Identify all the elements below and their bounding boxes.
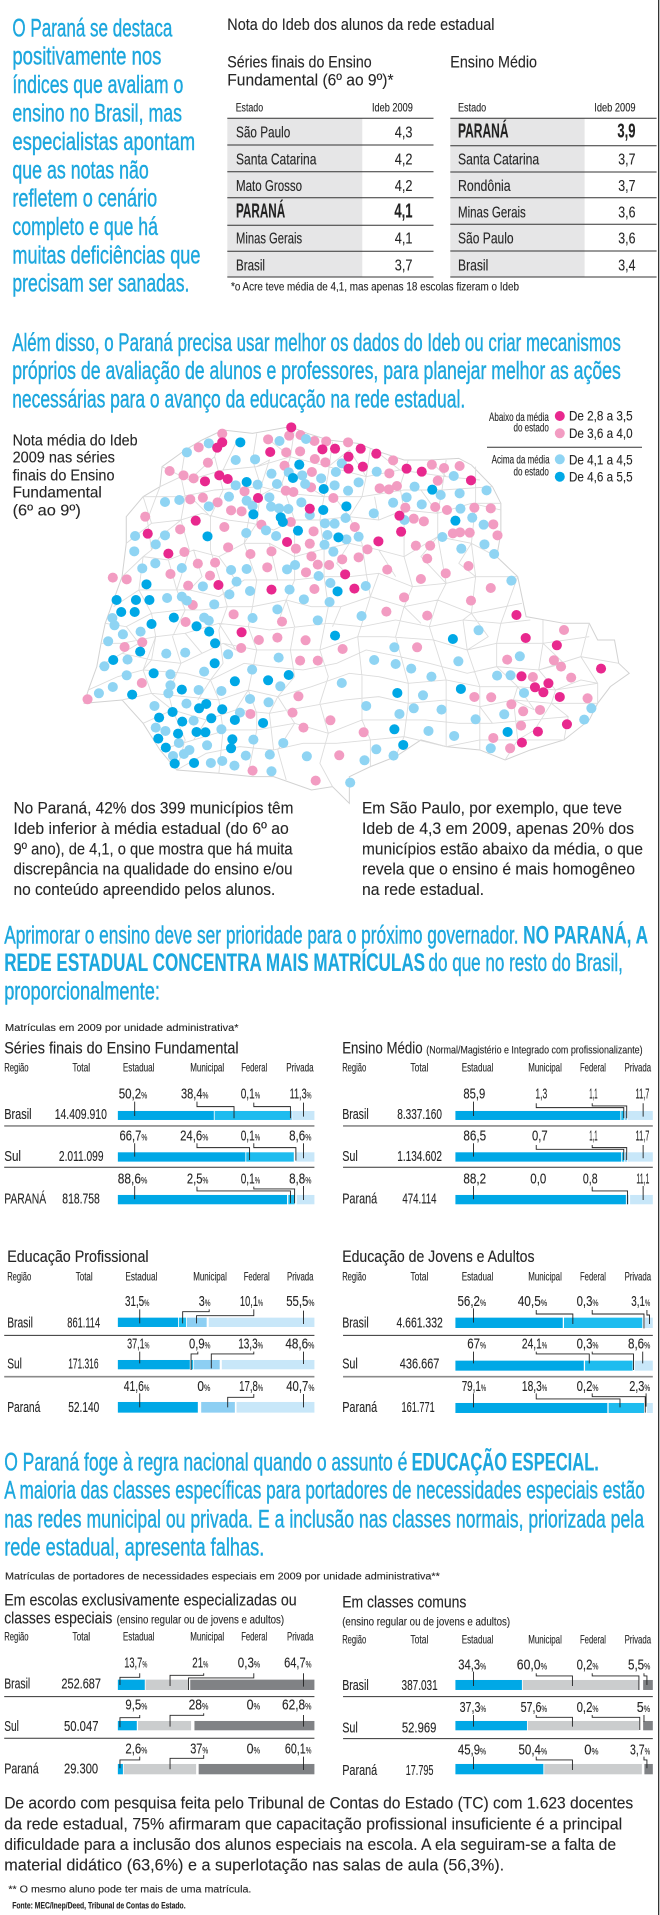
table: Ensino Médio: PARANÁ — [458, 120, 508, 143]
table: Séries finais: 4,3 — [395, 125, 413, 142]
row: Paraná: Paraná — [342, 1762, 378, 1779]
chart: classes comuns — [342, 1594, 653, 1779]
table: Séries finais: Santa Catarina — [236, 151, 316, 168]
row: Paraná — [342, 1170, 653, 1208]
column headers: Federal — [580, 1269, 606, 1283]
map: municípios do Paraná — [82, 422, 629, 803]
chart title — [342, 1039, 643, 1057]
table: Séries finais: PARANÁ — [236, 200, 285, 223]
row: Brasil — [342, 1293, 653, 1335]
map caption: (6º ao 9º) — [13, 502, 81, 519]
row: Brasil — [342, 1656, 653, 1697]
column headers: Privada — [287, 1630, 314, 1644]
row: Brasil: 64,7% — [284, 1655, 312, 1672]
row: Brasil: 0,3% — [238, 1655, 260, 1672]
column headers: Privada — [286, 1061, 314, 1075]
map caption — [13, 432, 138, 519]
row: Brasil: 3% — [199, 1293, 210, 1310]
column headers: Total — [72, 1061, 90, 1075]
row: Sul: 24,1% — [522, 1336, 547, 1353]
row: Sul: 436.667 — [400, 1356, 439, 1373]
column headers: Estadual — [125, 1269, 157, 1283]
column headers — [4, 1061, 314, 1075]
chart title: Ensino Médio — [342, 1039, 423, 1057]
table title: Ensino Médio — [450, 54, 537, 72]
row: Brasil: Brasil — [4, 1106, 32, 1123]
table: Séries finais: Estado — [236, 101, 263, 115]
column headers — [4, 1630, 314, 1644]
row: Brasil: 85,9 — [463, 1085, 485, 1102]
row: Brasil: Brasil — [4, 1675, 30, 1692]
row: Brasil: Brasil — [342, 1106, 369, 1123]
row: Sul: 0,2% — [577, 1699, 598, 1716]
intro headline: que as notas não — [12, 156, 149, 184]
chart title: Séries finais do Ensino Fundamental — [4, 1039, 239, 1057]
map caption: 2009 nas séries — [13, 450, 115, 467]
row: Brasil: 40,5% — [518, 1293, 547, 1310]
chart caption: Matrículas em 2009 por unidade administrativa* — [5, 1023, 239, 1034]
row: Sul: 62,8% — [282, 1697, 312, 1714]
row: Brasil: 56,2% — [458, 1293, 486, 1310]
row: Paraná — [4, 1740, 314, 1777]
text block: Paraná — [14, 798, 293, 899]
row: Paraná: 50,4% — [518, 1741, 547, 1758]
row: Sul — [342, 1336, 653, 1377]
chart: escolas especializadas — [4, 1592, 314, 1777]
intro headline: ensino no Brasil, mas — [12, 100, 182, 128]
row: Sul: 50.047 — [64, 1718, 98, 1735]
row: Sul: Sul — [342, 1148, 358, 1165]
section headline: educação especial: rede estadual, apresenta falhas. — [4, 1533, 264, 1561]
column headers — [7, 1269, 314, 1283]
intro headline: O Paraná se destaca — [12, 14, 172, 42]
row: Brasil: 10,1% — [240, 1293, 263, 1310]
row: Sul — [4, 1336, 314, 1377]
intro headline: positivamente nos — [12, 43, 161, 71]
row: Brasil: 21% — [192, 1655, 208, 1672]
row: Paraná: 18,3% — [522, 1378, 547, 1395]
row: Paraná — [342, 1741, 653, 1779]
chart: Séries finais do Ensino Fundamental — [4, 1039, 314, 1208]
row: Sul: Sul — [7, 1356, 22, 1373]
table title — [227, 54, 394, 89]
map legend: De 3,6 a 4,0 — [569, 425, 633, 441]
column headers: Região — [342, 1632, 366, 1646]
text block: pesquisa TC — [4, 1794, 633, 1875]
chart title: Em escolas exclusivamente especializadas ou — [4, 1592, 297, 1610]
footnote: ** O mesmo aluno pode ter mais de uma matrícula. — [8, 1884, 251, 1895]
chart title: Educação de Jovens e Adultos — [342, 1248, 534, 1266]
text block: São Paulo: Ideb de 4,3 em 2009, apenas 20% dos — [362, 819, 634, 838]
row: Paraná: 41,6% — [124, 1378, 149, 1395]
text block: pesquisa TC: dificuldade para a inclusão dos alunos especiais na escola. A ela seguiram-se a falta de — [4, 1835, 616, 1854]
row: Sul: 67% — [467, 1336, 486, 1353]
table: Ensino Médio: 3,4 — [618, 257, 636, 274]
table: Ensino Médio: 3,9 — [617, 121, 636, 143]
text block: Paraná: No Paraná, 42% dos 399 municípios têm — [14, 798, 293, 817]
column headers — [342, 1269, 651, 1283]
row: Brasil: Brasil — [342, 1677, 369, 1694]
table: Ensino Médio: Estado — [458, 101, 486, 115]
text block: Paraná: Ideb inferior à média estadual (do 6º ao — [14, 819, 289, 838]
row: Brasil: 5,5% — [628, 1656, 650, 1673]
text block: Paraná: discrepância na qualidade do ensino e/ou — [14, 860, 292, 879]
table: Séries finais: 3,7 — [395, 257, 413, 274]
row: Sul — [342, 1699, 653, 1739]
intro headline: precisam ser sanadas. — [12, 270, 189, 298]
row: Sul: 0,7 — [532, 1128, 548, 1145]
row: Brasil: 0,3% — [577, 1293, 598, 1310]
row: Brasil — [4, 1293, 314, 1335]
row: Brasil: 50,2% — [119, 1085, 147, 1102]
intro headline: índices que avaliam o — [12, 71, 183, 99]
row: Sul: Sul — [342, 1356, 358, 1373]
map legend: De 2,8 a 3,5 — [569, 408, 633, 424]
column headers: Região — [4, 1630, 29, 1644]
table: Ensino Médio: Santa Catarina — [458, 151, 539, 168]
text block: Paraná: 9º ano), de 4,1, o que mostra que há muita — [14, 839, 293, 858]
text block: São Paulo: Em São Paulo, por exemplo, que teve — [362, 798, 622, 817]
row: Sul — [4, 1697, 314, 1738]
chart: Educação de Jovens e Adultos — [342, 1248, 653, 1416]
row: Brasil: 60,0% — [517, 1656, 547, 1673]
column headers: Federal — [580, 1632, 606, 1646]
row: Paraná: 40,7% — [286, 1378, 314, 1395]
row: Paraná: 2,5% — [187, 1170, 208, 1187]
row: Paraná: 17.795 — [406, 1762, 434, 1779]
table: Ensino Médio: 3,6 — [618, 205, 636, 222]
row: Sul: 0,9% — [189, 1336, 210, 1353]
section headline: educação especial: O Paraná foge à regra nacional quando o assunto é — [4, 1449, 407, 1477]
row: Paraná: Paraná — [7, 1399, 41, 1416]
column headers: Privada — [287, 1269, 314, 1283]
row: Sul: 2.011.099 — [59, 1148, 104, 1165]
table: Ensino Médio: Minas Gerais — [458, 205, 526, 222]
row: Paraná: 29.300 — [64, 1760, 98, 1777]
column headers: Estadual — [462, 1061, 493, 1075]
row: Sul: 1.134.602 — [397, 1148, 442, 1165]
column headers — [342, 1061, 651, 1075]
row: Brasil — [4, 1085, 314, 1126]
row: Sul: 8,6% — [628, 1336, 650, 1353]
row: Paraná: 79,1% — [462, 1378, 486, 1395]
column headers: Municipal — [528, 1061, 562, 1075]
row: Brasil: 3,1% — [631, 1293, 650, 1310]
row: Paraná: 0% — [197, 1378, 210, 1395]
row: Sul: 57,6% — [521, 1699, 547, 1716]
row: Brasil: 38,4% — [181, 1085, 208, 1102]
row: Brasil: 1,1 — [589, 1085, 598, 1102]
column headers: Federal — [241, 1630, 267, 1644]
text block: São Paulo: revela que o ensino é mais homogêneo — [362, 860, 635, 879]
row: Sul: 37,1% — [127, 1336, 149, 1353]
row: Brasil: 31,5% — [125, 1293, 149, 1310]
table: Ensino Médio: Rondônia — [458, 178, 511, 195]
row: Sul: 0,3% — [577, 1336, 598, 1353]
row: Paraná: 17,8% — [239, 1378, 263, 1395]
column headers: Total — [410, 1269, 428, 1283]
row: Paraná — [7, 1378, 314, 1416]
text block: São Paulo — [362, 798, 643, 899]
column headers: Total — [410, 1061, 428, 1075]
column headers: Federal — [580, 1061, 606, 1075]
column headers: Região — [7, 1269, 31, 1283]
row: Sul — [342, 1128, 653, 1167]
row: Paraná: 818.758 — [62, 1191, 100, 1208]
row: Paraná: Paraná — [342, 1191, 378, 1208]
row: Sul: 13,3% — [238, 1336, 263, 1353]
row: Brasil: 252.687 — [61, 1675, 101, 1692]
table: Séries finais — [227, 54, 434, 277]
table: Séries finais: 4,1 — [395, 231, 413, 248]
table footnote: *o Acre teve média de 4,1, mas apenas 18 escolas fizeram o Ideb — [231, 280, 519, 294]
chart title: classes especiais — [4, 1609, 112, 1627]
source: Fonte: MEC/Inep/Deed, Tribunal de Contas do Estado. — [12, 1900, 186, 1910]
column headers — [342, 1632, 651, 1646]
section headline: matrículas: proporcionalmente: — [4, 977, 160, 1005]
row: Brasil: 0,1% — [241, 1085, 260, 1102]
row: Sul: 24,6% — [180, 1128, 208, 1145]
chart title: (ensino regular ou de jovens e adultos) — [342, 1614, 510, 1628]
column headers: Federal — [241, 1061, 267, 1075]
column headers: Total — [72, 1630, 90, 1644]
row: Paraná: 3,7% — [630, 1741, 650, 1758]
text block: pesquisa TC: material didático (63,6%) e a superlotação nas salas de aula (56,3%). — [4, 1856, 504, 1875]
row: Paraná: PARANÁ — [4, 1191, 46, 1208]
row: Paraná: 52.140 — [68, 1399, 99, 1416]
row: Paraná: 37% — [190, 1740, 208, 1757]
chart title: (ensino regular ou de jovens e adultos) — [117, 1612, 284, 1626]
row: Paraná: 45,9% — [458, 1741, 486, 1758]
text block: pesquisa TC: da rede estadual, 75% afirmaram que capacitação profissional insuficiente é a principal — [4, 1814, 622, 1833]
row: Paraná: 0% — [584, 1741, 598, 1758]
row: Brasil: 861.114 — [67, 1314, 100, 1331]
map legend — [487, 408, 642, 485]
table: Séries finais: Minas Gerais — [236, 231, 302, 248]
row: Brasil — [4, 1655, 314, 1697]
map legend: De 4,6 a 5,5 — [569, 469, 633, 485]
column headers: Estadual — [462, 1269, 493, 1283]
row: Paraná: 0,1% — [241, 1170, 260, 1187]
row: Paraná: 88,6% — [118, 1170, 147, 1187]
column headers: Municipal — [190, 1061, 224, 1075]
row: Brasil — [342, 1085, 653, 1126]
column headers: Estadual — [123, 1630, 154, 1644]
text block: São Paulo: na rede estadual. — [362, 880, 484, 899]
table: Séries finais: 4,2 — [395, 178, 413, 195]
section headline: matrículas: REDE ESTADUAL CONCENTRA MAIS MATRÍCULAS — [4, 948, 425, 977]
chart title: Educação Profissional — [7, 1248, 149, 1266]
column headers: Total — [410, 1632, 428, 1646]
map caption: Nota média do Ideb — [13, 432, 138, 449]
row: Paraná: 8,8% — [289, 1170, 311, 1187]
panel: Ideb tables — [227, 16, 657, 294]
row: Sul: 48,6% — [285, 1336, 314, 1353]
table title: Fundamental (6º ao 9º)* — [227, 71, 394, 89]
intro headline: muitas deficiências que — [12, 241, 200, 269]
row: Sul: Sul — [4, 1718, 19, 1735]
row: Sul: 0% — [247, 1697, 260, 1714]
row: Sul — [4, 1128, 314, 1167]
chart title: Em classes comuns — [342, 1594, 466, 1612]
row: Brasil: Brasil — [7, 1314, 33, 1331]
intro headline — [12, 14, 200, 298]
table: Ensino Médio — [450, 54, 657, 277]
section headline: educação especial — [4, 1447, 645, 1561]
row: Paraná: 2,3% — [629, 1378, 650, 1395]
text block: Paraná: no conteúdo apreendido pelos alunos. — [14, 880, 275, 899]
row: Paraná: 0,2% — [577, 1378, 598, 1395]
row: Brasil: 14.409.910 — [55, 1106, 107, 1123]
intro headline: completo e que há — [12, 213, 158, 241]
table: Ensino Médio: Brasil — [458, 257, 488, 274]
row: Paraná — [4, 1170, 314, 1208]
column headers: Municipal — [190, 1630, 224, 1644]
column headers: Estadual — [462, 1632, 493, 1646]
map legend: do estado — [514, 421, 549, 435]
map legend: Abaixo da média — [489, 410, 549, 424]
row: Brasil: 1,3 — [535, 1085, 547, 1102]
section headline: matrículas — [4, 920, 648, 1005]
section headline: dados do Ideb: necessárias para o avanço da educação na rede estadual. — [12, 385, 465, 413]
column headers: Região — [342, 1061, 366, 1075]
map legend: Acima da média — [492, 452, 550, 466]
chart: Educação Profissional — [4, 1248, 314, 1416]
intro headline: especialistas apontam — [12, 128, 195, 156]
row: Brasil: 4.661.332 — [396, 1314, 443, 1331]
row: Brasil: 13,7% — [124, 1655, 147, 1672]
row: Brasil: 11,3% — [290, 1085, 312, 1102]
chart caption: Matrículas de portadores de necessidades especiais em 2009 por unidade administrativa** — [5, 1571, 440, 1582]
column headers: Total — [76, 1269, 93, 1283]
row: Sul: 37,3% — [460, 1699, 486, 1716]
map legend: De 4,1 a 4,5 — [569, 451, 633, 467]
row: Paraná: 161.771 — [402, 1399, 435, 1416]
row: Brasil: 0,2% — [577, 1656, 598, 1673]
map caption: Fundamental — [13, 485, 102, 502]
column headers: Região — [4, 1061, 29, 1075]
row: Sul: 8,6% — [289, 1128, 311, 1145]
row: Paraná: 0% — [247, 1740, 260, 1757]
row: Sul: 1,1 — [589, 1128, 598, 1145]
table: Ensino Médio: 3,6 — [618, 231, 636, 248]
row: Paraná: Paraná — [4, 1760, 39, 1777]
column headers: Municipal — [193, 1269, 227, 1283]
table title: Séries finais do Ensino — [227, 54, 372, 72]
row: Sul: 9,5% — [125, 1697, 147, 1714]
map caption: finais do Ensino — [13, 467, 115, 484]
chart title — [342, 1594, 510, 1628]
table: Séries finais: São Paulo — [236, 125, 290, 142]
table: Séries finais: 4,2 — [395, 151, 413, 168]
row: Sul: 86,5 — [463, 1128, 486, 1145]
row: Paraná: 474.114 — [402, 1191, 436, 1208]
table: Ensino Médio: 3,7 — [618, 151, 636, 168]
row: Brasil: 387.031 — [402, 1677, 438, 1694]
row: Sul: Sul — [4, 1148, 21, 1165]
row: Sul: 5% — [637, 1699, 650, 1716]
column headers: Federal — [244, 1269, 270, 1283]
table: Ensino Médio: Ideb 2009 — [594, 101, 636, 115]
row: Brasil: 34,3% — [458, 1656, 486, 1673]
row: Sul: 171.316 — [68, 1356, 98, 1373]
row: Sul: 28% — [189, 1697, 208, 1714]
chart title — [4, 1592, 297, 1627]
intro headline: refletem o cenário — [12, 185, 157, 213]
section headline: dados do Ideb — [12, 329, 621, 413]
row: Paraná: 2,6% — [125, 1740, 147, 1757]
table: Séries finais: Brasil — [236, 257, 265, 274]
map legend: do estado — [514, 464, 549, 478]
row: Sul: Sul — [342, 1720, 358, 1737]
row: Paraná: 60,1% — [285, 1740, 311, 1757]
row: Paraná — [342, 1378, 653, 1416]
column headers: Municipal — [528, 1269, 562, 1283]
row: Sul: 66,7% — [120, 1128, 147, 1145]
row: Brasil: 55,5% — [286, 1293, 314, 1310]
row: Brasil: Brasil — [342, 1314, 369, 1331]
table: Séries finais: Mato Grosso — [236, 178, 302, 195]
row: Paraná: 0,8 — [583, 1170, 598, 1187]
row: Paraná: 0,0 — [530, 1170, 546, 1187]
row: Paraná: Paraná — [342, 1399, 378, 1416]
row: Sul: 0,1% — [241, 1128, 260, 1145]
row: Sul: 52.969 — [402, 1720, 436, 1737]
table: Séries finais: Ideb 2009 — [372, 101, 413, 115]
table: Ensino Médio: São Paulo — [458, 231, 514, 248]
row: Brasil: 8.337.160 — [397, 1106, 442, 1123]
tables heading: Nota do Ideb dos alunos da rede estadual — [227, 16, 495, 34]
table: Ensino Médio: 3,7 — [618, 178, 636, 195]
column headers: Municipal — [528, 1632, 562, 1646]
table: Séries finais: 4,1 — [394, 201, 412, 223]
column headers: Região — [342, 1269, 366, 1283]
column headers: Estadual — [123, 1061, 154, 1075]
row: Paraná: 88,2 — [463, 1170, 486, 1187]
chart: Ensino Médio — [342, 1039, 653, 1208]
